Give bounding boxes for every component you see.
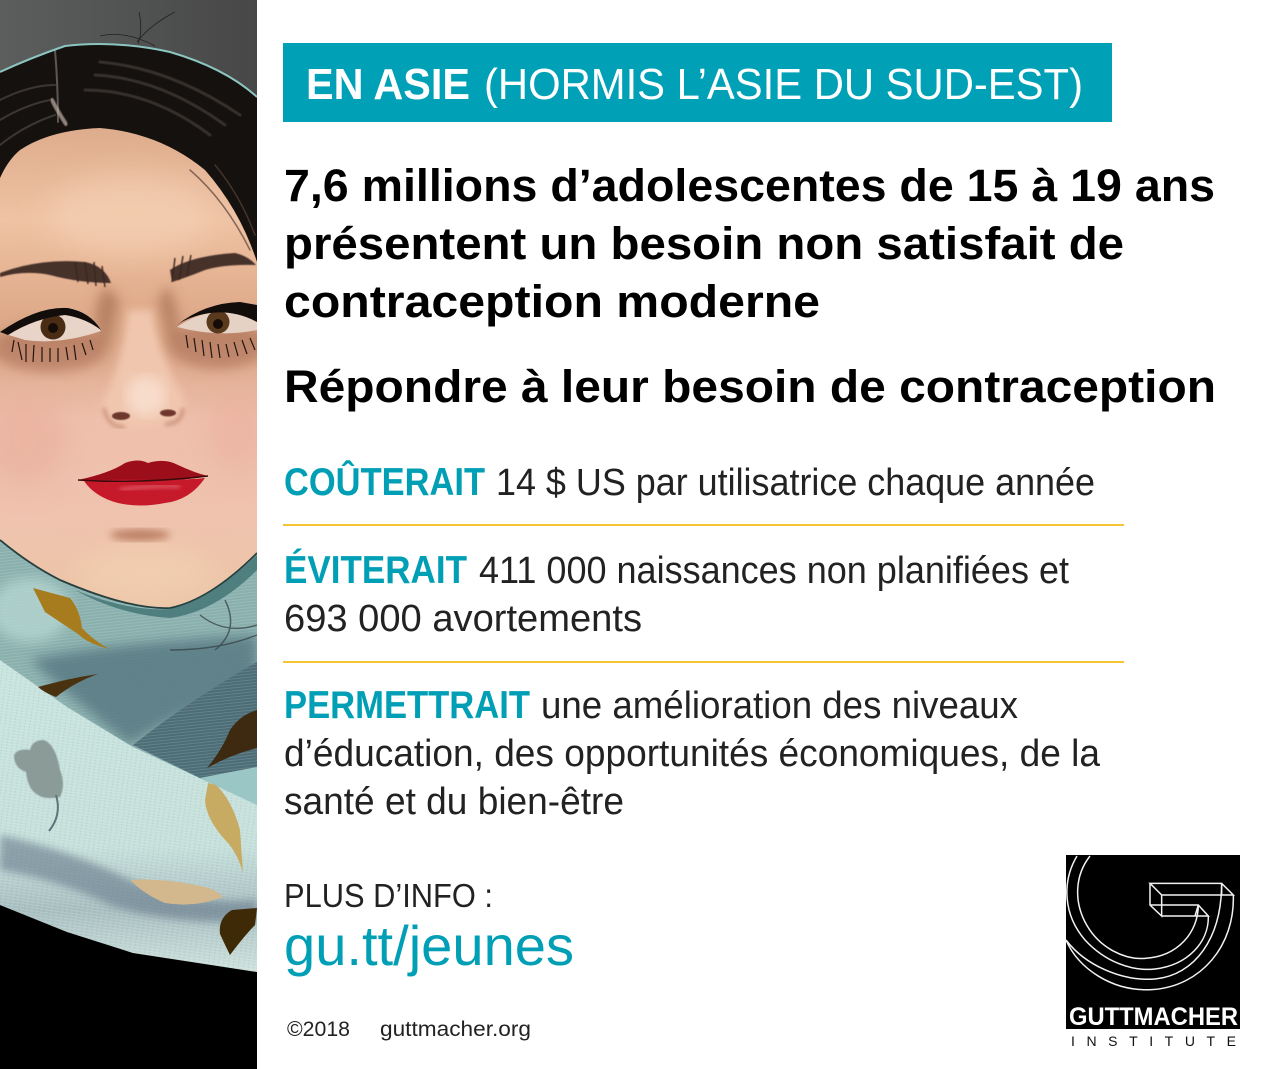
- banner title regular: (HORMIS L’ASIE DU SUD-EST): [484, 60, 1083, 109]
- avoided keyword: ÉVITERAIT: [284, 548, 467, 592]
- hair: [0, 44, 257, 262]
- logo subtitle: INSTITUTE: [1071, 1033, 1236, 1049]
- more info: [284, 877, 574, 977]
- headline line 1: 7,6 millions d’adolescentes de 15 à 19 ans: [284, 160, 1215, 211]
- benefits line 3: santé et du bien-être: [284, 781, 624, 823]
- scarf: dark triangle fold: [133, 662, 257, 778]
- nose: [103, 310, 185, 428]
- photo backdrop: [0, 0, 257, 96]
- face: [0, 120, 257, 620]
- leaf: dark bottom: [220, 908, 257, 955]
- banner title bold: EN ASIE: [306, 60, 470, 109]
- photo: woman with teal scarf: [0, 0, 270, 1069]
- more info link: gu.tt/jeunes: [284, 914, 574, 977]
- scarf: light band: [0, 660, 257, 972]
- more info label: PLUS D’INFO :: [284, 877, 493, 914]
- leaf: dark left: [38, 674, 98, 697]
- subheading: Répondre à leur besoin de contraception: [284, 361, 1216, 412]
- chin shadow below lip: [110, 529, 170, 541]
- cheek blush: [0, 175, 270, 597]
- headline line 3: contraception moderne: [284, 276, 820, 327]
- scarf edge over hair: [0, 44, 257, 97]
- black clothing: [0, 905, 257, 1069]
- scarf: dark teal fold: [0, 541, 257, 790]
- scarf: dark hair strands under chin: [170, 600, 257, 650]
- headline line 2: présentent un besoin non satisfait de: [284, 218, 1124, 269]
- eye socket shading: [0, 285, 268, 372]
- leaf: grey clover: [14, 740, 63, 831]
- hair strands: [0, 50, 255, 250]
- banner background: [283, 43, 1112, 122]
- scarf: shadow middle: [30, 635, 257, 745]
- logo: Guttmacher Institute: [1066, 855, 1240, 1049]
- benefits line 2: d’éducation, des opportunités économiques, de la: [284, 733, 1101, 775]
- benefits keyword: PERMETTRAIT: [284, 684, 530, 727]
- benefits line 1: une amélioration des niveaux: [541, 685, 1018, 727]
- leaf: tan: [130, 880, 223, 905]
- footer: [287, 1018, 531, 1041]
- scarf: dark teal texture: [0, 543, 257, 779]
- avoided detail line 2: 693 000 avortements: [284, 598, 642, 640]
- cost keyword: COÛTERAIT: [284, 459, 485, 504]
- banner: [283, 43, 1112, 122]
- stray hairs: [100, 12, 175, 46]
- leaf: gold upper: [33, 588, 110, 649]
- website: guttmacher.org: [380, 1018, 531, 1041]
- left eyebrow: [0, 261, 111, 287]
- leaf: gold right: [205, 783, 243, 873]
- item: cost: [284, 459, 1095, 504]
- headline: [284, 160, 1215, 327]
- avoided detail line 1: 411 000 naissances non planifiées et: [479, 550, 1069, 592]
- logo wordmark: GUTTMACHER: [1069, 1003, 1238, 1031]
- right eye: [177, 302, 257, 358]
- scarf: light band shadow: [0, 835, 257, 922]
- scarf: translucent strip right: [200, 767, 257, 806]
- cost detail: 14 $ US par utilisatrice chaque année: [496, 462, 1095, 504]
- scarf: dark under-chin: [75, 555, 257, 618]
- item: avoided: [284, 548, 1069, 640]
- lips: [78, 460, 208, 506]
- item: benefits: [284, 684, 1101, 823]
- scarf: dark triangle texture: [133, 662, 257, 778]
- scarf: pale upper left: [0, 578, 70, 642]
- left eye: [0, 308, 101, 362]
- logo emblem: [1066, 856, 1233, 990]
- leaf: dark right: [207, 710, 257, 768]
- scarf: neck edge: [0, 540, 257, 608]
- logo black square: [1066, 855, 1240, 1029]
- right eyebrow: [170, 253, 256, 282]
- copyright: ©2018: [287, 1018, 350, 1041]
- scarf: light band texture: [0, 660, 257, 972]
